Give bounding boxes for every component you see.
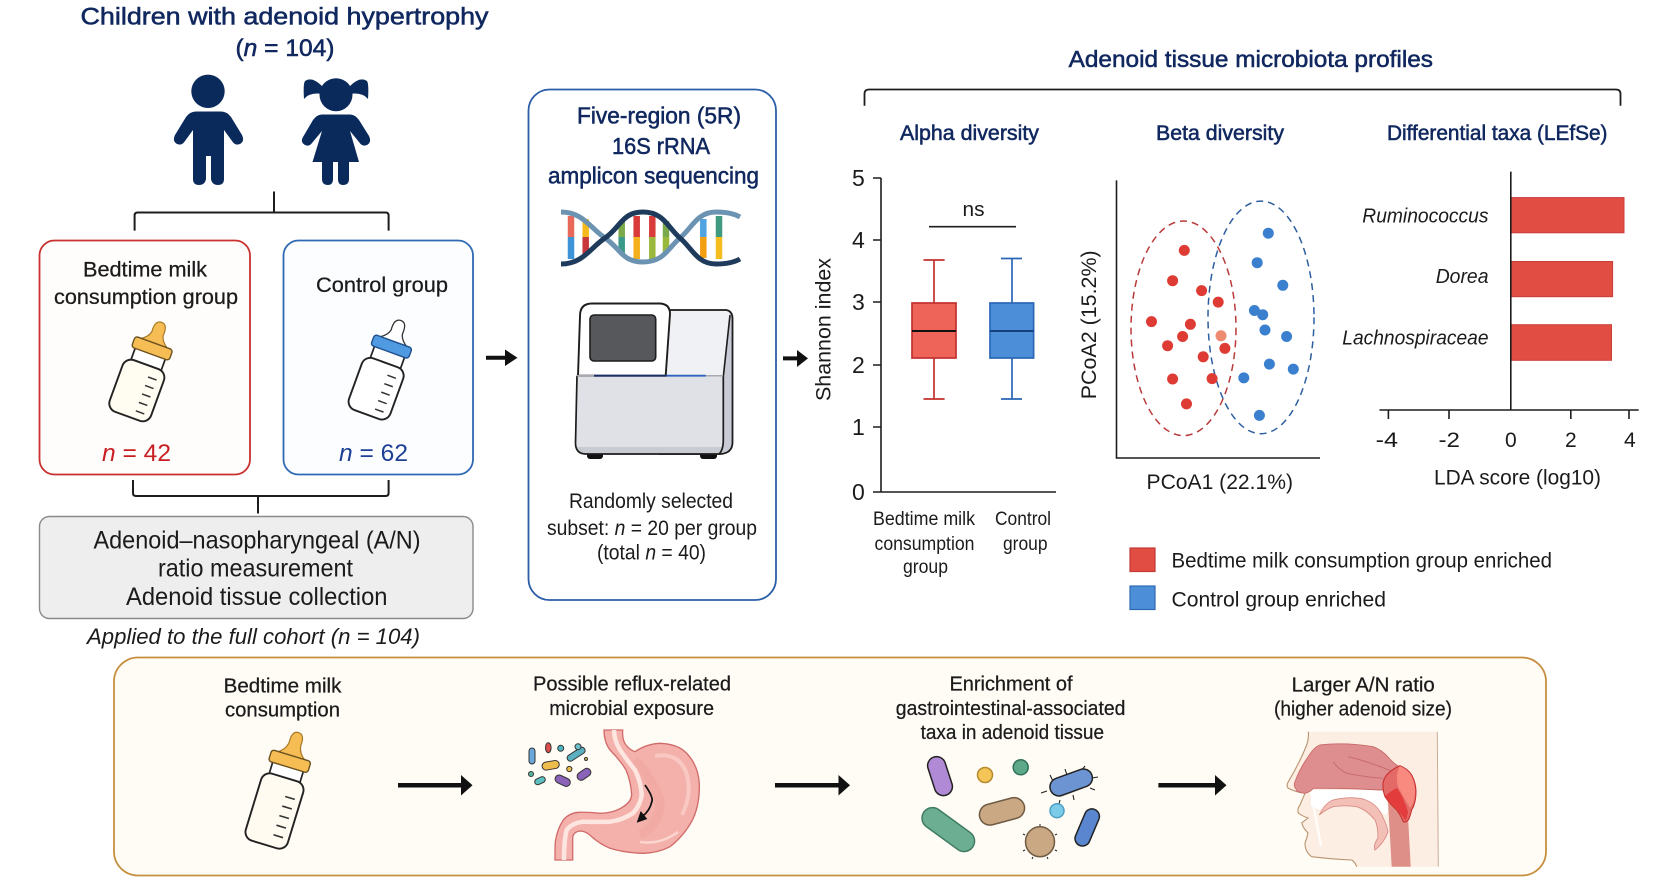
chart: differential taxa LEfSe: Ruminococcus bbox=[1362, 206, 1488, 228]
label: bedtime milk consumption group: Bedtime milk bbox=[83, 258, 208, 282]
chart: alpha diversity boxplot: 3 bbox=[852, 289, 865, 315]
chart: alpha diversity boxplot bbox=[812, 122, 1056, 578]
title: children with adenoid hypertrophy: Children with adenoid hypertrophy bbox=[80, 3, 488, 30]
panel: control group bbox=[284, 240, 473, 474]
step 4: larger A/N ratio: Larger A/N ratio bbox=[1292, 675, 1435, 697]
step 4: larger A/N ratio: (higher adenoid size) bbox=[1274, 699, 1452, 721]
icon: bottle with yellow cap bbox=[107, 315, 182, 424]
icon: bottle bbox=[243, 726, 320, 851]
chart: differential taxa LEfSe: LDA score (log10) bbox=[1434, 467, 1601, 490]
step 3: enrichment of gastrointestinal taxa: taxa in adenoid tissue bbox=[921, 722, 1104, 744]
heading: sequencing: Five-region (5R) bbox=[577, 103, 741, 129]
panel: A/N ratio measurement: Adenoid tissue collection bbox=[126, 583, 388, 611]
title: children with adenoid hypertrophy bbox=[80, 3, 488, 62]
chart: differential taxa LEfSe bbox=[1342, 122, 1639, 490]
chart: alpha diversity boxplot: consumption bbox=[874, 534, 974, 555]
panel: bedtime milk group bbox=[40, 240, 250, 474]
panel: proposed pathway bbox=[114, 658, 1546, 876]
icon: boy bbox=[174, 75, 243, 185]
chart: differential taxa LEfSe: -2 bbox=[1438, 429, 1460, 452]
legend: Control group enriched bbox=[1172, 589, 1386, 612]
step 1: bedtime milk consumption: consumption bbox=[225, 700, 340, 722]
chart: beta diversity PCoA: PCoA1 (22.1%) bbox=[1146, 471, 1293, 494]
icon: sequencing instrument bbox=[576, 304, 733, 459]
arrow: sequencing to profiles bbox=[783, 350, 808, 367]
step 1: bedtime milk consumption: Bedtime milk bbox=[224, 675, 342, 697]
icon: head anatomy with enlarged adenoid bbox=[1287, 732, 1438, 867]
step 2: reflux-related microbial exposure bbox=[528, 674, 731, 860]
chart: alpha diversity boxplot: group bbox=[1003, 534, 1048, 555]
chart: differential taxa LEfSe: -4 bbox=[1376, 429, 1398, 452]
bracket bbox=[864, 90, 1620, 106]
chart: alpha diversity boxplot: 0 bbox=[852, 479, 865, 505]
step 1: bedtime milk consumption bbox=[224, 675, 342, 851]
chart: alpha diversity boxplot: 4 bbox=[852, 227, 865, 253]
connector: merge groups bbox=[133, 480, 389, 514]
connector: split into two groups bbox=[135, 192, 389, 231]
arrow: step 1 to step 2 bbox=[398, 775, 472, 796]
chart: alpha diversity boxplot: ns bbox=[962, 199, 984, 221]
step 3: enrichment of gastrointestinal taxa bbox=[896, 674, 1125, 859]
text: randomly selected subset: subset: n = 20 per group bbox=[547, 517, 757, 540]
panel: sequencing bbox=[528, 90, 776, 600]
chart: alpha diversity boxplot: Bedtime milk bbox=[873, 509, 975, 530]
chart: alpha diversity boxplot: 5 bbox=[852, 165, 865, 191]
heading: sequencing: amplicon sequencing bbox=[548, 162, 759, 188]
heading: sequencing bbox=[548, 103, 759, 188]
panel: A/N ratio measurement bbox=[40, 516, 473, 618]
step 2: reflux-related microbial exposure: Possible reflux-related bbox=[533, 674, 731, 696]
label: bedtime milk consumption group: consumption group bbox=[54, 286, 238, 309]
label: control group: Control group bbox=[316, 274, 448, 297]
chart: alpha diversity boxplot: 2 bbox=[852, 352, 865, 378]
title: children with adenoid hypertrophy: (n = 104) bbox=[236, 35, 334, 62]
arrow: step 2 to step 3 bbox=[775, 775, 850, 796]
step 3: enrichment of gastrointestinal taxa: Enrichment of bbox=[950, 674, 1073, 696]
text: n = 62: n = 62 bbox=[339, 440, 408, 467]
arrow: step 3 to step 4 bbox=[1158, 775, 1226, 796]
text: randomly selected subset: (total n = 40) bbox=[597, 542, 706, 564]
heading: adenoid tissue microbiota profiles: Adenoid tissue microbiota profiles bbox=[1069, 46, 1433, 72]
text: randomly selected subset: Randomly selected bbox=[569, 490, 733, 513]
chart: differential taxa LEfSe: Lachnospiraceae bbox=[1342, 328, 1488, 350]
panel: A/N ratio measurement: ratio measurement bbox=[158, 555, 353, 583]
text: randomly selected subset bbox=[547, 490, 757, 564]
chart: differential taxa LEfSe: 0 bbox=[1505, 429, 1517, 452]
label: bedtime milk consumption group bbox=[54, 258, 238, 309]
icon: bottle with blue cap bbox=[346, 313, 422, 422]
panel: cohort bbox=[40, 3, 488, 649]
chart: alpha diversity boxplot: Shannon index bbox=[812, 257, 836, 401]
icon: small microbes bbox=[528, 743, 592, 788]
chart: beta diversity PCoA: Beta diversity bbox=[1156, 122, 1284, 145]
chart: beta diversity PCoA: PCoA2 (15.2%) bbox=[1078, 250, 1101, 399]
chart: differential taxa LEfSe: 4 bbox=[1624, 429, 1636, 452]
arrow: cohort to sequencing bbox=[486, 350, 518, 366]
chart: beta diversity PCoA bbox=[1078, 122, 1320, 494]
panel: microbiota profiles bbox=[812, 46, 1639, 612]
step 2: reflux-related microbial exposure: microbial exposure bbox=[549, 698, 714, 720]
chart: differential taxa LEfSe: Differential taxa (LEfSe) bbox=[1387, 122, 1608, 145]
icon: microbes bbox=[918, 754, 1102, 859]
note: applied to the full cohort: Applied to the full cohort (n = 104) bbox=[85, 624, 420, 649]
chart: alpha diversity boxplot: Control bbox=[995, 509, 1051, 530]
chart: alpha diversity boxplot: Alpha diversity bbox=[900, 122, 1040, 145]
chart: alpha diversity boxplot: 1 bbox=[852, 414, 865, 440]
icon: girl bbox=[302, 78, 370, 185]
chart: alpha diversity boxplot: group bbox=[903, 557, 948, 578]
legend: Bedtime milk consumption group enriched bbox=[1172, 550, 1552, 573]
heading: sequencing: 16S rRNA bbox=[612, 133, 711, 159]
panel: A/N ratio measurement: Adenoid–nasopharyngeal (A/N) bbox=[94, 526, 420, 554]
step 4: larger A/N ratio bbox=[1274, 675, 1452, 867]
step 3: enrichment of gastrointestinal taxa: gastrointestinal-associated bbox=[896, 698, 1125, 720]
icon: stomach bbox=[555, 730, 699, 860]
legend bbox=[1130, 548, 1552, 612]
text: n = 42: n = 42 bbox=[102, 440, 171, 467]
chart: differential taxa LEfSe: 2 bbox=[1565, 429, 1577, 452]
icon: DNA helix bbox=[561, 212, 740, 264]
chart: differential taxa LEfSe: Dorea bbox=[1436, 266, 1488, 288]
